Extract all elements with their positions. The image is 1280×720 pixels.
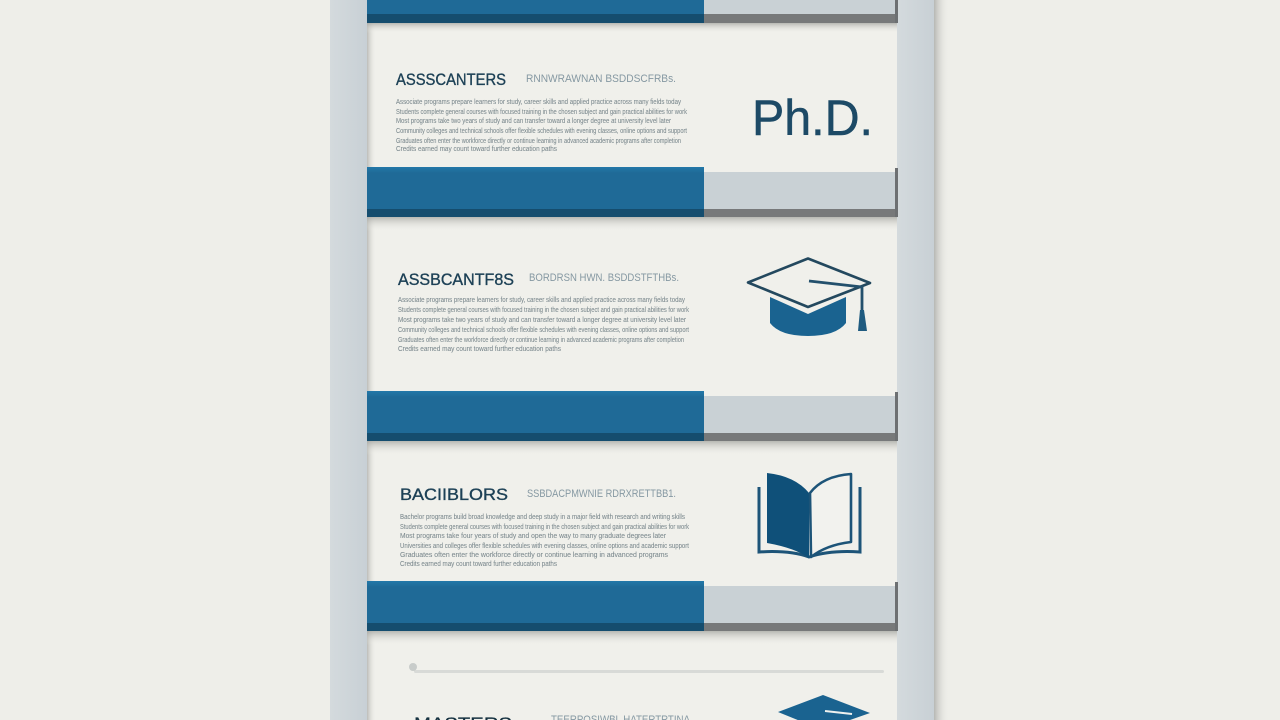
icon: open book	[759, 473, 860, 558]
body text: Graduates often enter the workforce directly or continue learning in advanced academic programs after completion	[396, 138, 681, 145]
panel: associates top	[396, 70, 873, 153]
subheading: SSBDACPMWNIE RDRXRETTBB1.	[527, 488, 676, 500]
rung: 2	[367, 391, 898, 455]
body text: Credits earned may count toward further education paths	[396, 146, 557, 153]
heading: BACIIBLORS	[400, 485, 508, 504]
body text: Credits earned may count toward further education paths	[398, 346, 561, 353]
body text: Community colleges and technical schools offer flexible schedules with evening classes, online options and support	[396, 128, 687, 135]
body text: Community colleges and technical schools offer flexible schedules with evening classes, online options and support	[398, 327, 689, 334]
heading: ASSBCANTF8S	[398, 270, 514, 289]
body text: Students complete general courses with focused training in the chosen subject and gain practical abilities for work	[400, 524, 689, 531]
body text: Associate programs prepare learners for study, career skills and applied practice across many fields today	[396, 99, 681, 106]
body text: Associate programs prepare learners for study, career skills and applied practice across many fields today	[398, 297, 685, 304]
body text: Most programs take two years of study and can transfer toward a longer degree at university level later	[396, 118, 672, 125]
body text: Most programs take four years of study and open the way to many graduate degrees later	[400, 533, 667, 540]
rung: top	[367, 0, 898, 33]
panel: associates middle	[398, 258, 870, 353]
body text: Students complete general courses with focused training in the chosen subject and gain practical abilities for work	[396, 109, 687, 116]
icon: graduation cap solid	[778, 695, 870, 720]
Ph.D. label: Ph.D.	[752, 90, 873, 146]
panel: masters	[409, 663, 884, 720]
body text	[398, 297, 689, 353]
body text	[396, 99, 687, 153]
subheading: RNNWRAWNAN BSDDSCFRBs.	[526, 73, 676, 85]
body text: Credits earned may count toward further education paths	[400, 561, 557, 568]
rung: 1	[367, 167, 898, 231]
subheading: BORDRSN HWN. BSDDSTFTHBs.	[529, 272, 679, 284]
body text: Graduates often enter the workforce directly or continue learning in advanced programs	[400, 552, 668, 559]
body text: Bachelor programs build broad knowledge and deep study in a major field with research and writing skills	[400, 514, 685, 521]
left rail	[330, 0, 367, 720]
body text	[400, 514, 689, 568]
body text: Students complete general courses with focused training in the chosen subject and gain practical abilities for work	[398, 307, 689, 314]
body text: Most programs take two years of study and can transfer toward a longer degree at university level later	[398, 317, 687, 324]
body text: Universities and colleges offer flexible schedules with evening classes, online options and academic support	[400, 543, 689, 550]
body text: Graduates often enter the workforce directly or continue learning in advanced academic programs after completion	[398, 337, 684, 344]
slider track	[409, 663, 884, 673]
panel: bachelors	[400, 473, 860, 568]
icon: graduation cap	[748, 258, 870, 336]
rung: 3	[367, 581, 898, 645]
ladder frame	[330, 0, 949, 720]
heading: ASSSCANTERS	[396, 70, 506, 89]
right rail	[897, 0, 949, 720]
